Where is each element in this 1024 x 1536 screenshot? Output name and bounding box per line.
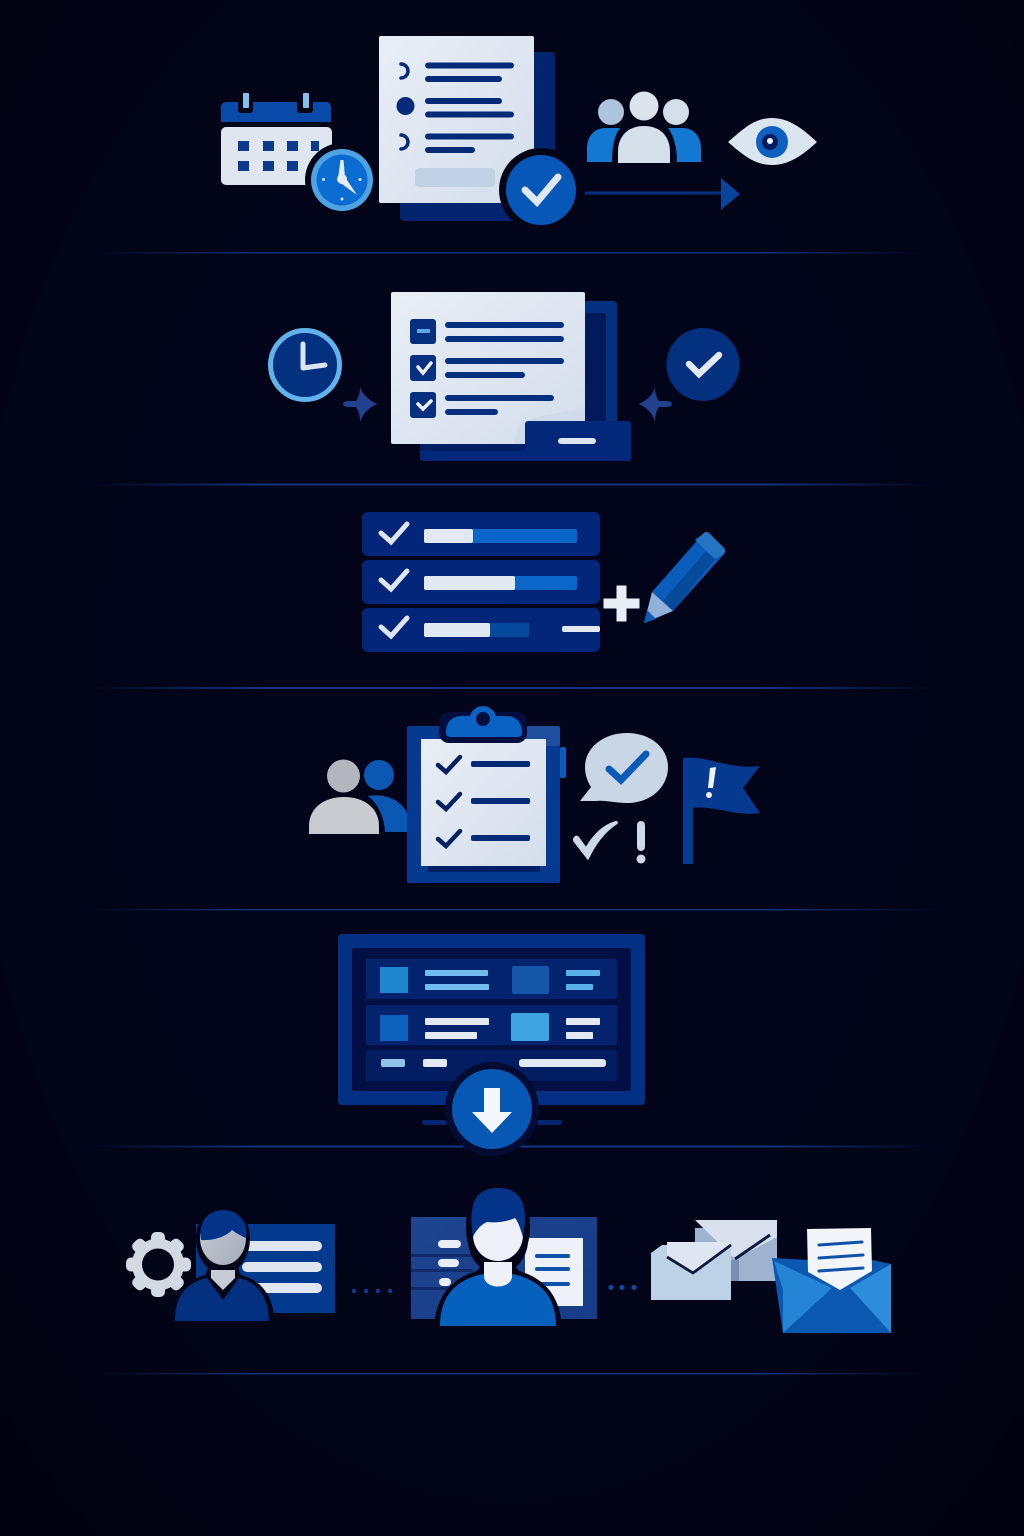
section 3: progress rows and pencil <box>362 512 725 652</box>
icon: pencil <box>644 532 725 623</box>
front tray with dash <box>420 421 631 461</box>
icon: plus <box>604 586 639 621</box>
person with collar <box>171 1206 275 1325</box>
check mark <box>574 822 617 859</box>
icon: two people <box>309 760 408 834</box>
progress row 1 <box>362 512 600 556</box>
section 4: team clipboard review <box>309 706 760 883</box>
arrow star left <box>343 387 377 422</box>
arrow right <box>585 178 740 210</box>
progress row 3 <box>362 608 600 652</box>
central person <box>434 1185 562 1329</box>
table row 2 <box>366 1005 617 1045</box>
dots <box>352 1289 392 1293</box>
icon: gear <box>126 1232 191 1297</box>
envelope front <box>651 1242 731 1300</box>
centre panel <box>411 1217 597 1319</box>
clipboard <box>407 706 566 883</box>
document with list <box>379 36 534 203</box>
icon: group of people <box>587 92 701 163</box>
stand lines <box>422 1120 562 1125</box>
dots <box>608 1285 636 1290</box>
progress row 2 <box>362 560 600 604</box>
icon: check circle <box>666 328 740 401</box>
section 1: review document workflow <box>221 36 817 232</box>
download badge <box>445 1062 539 1156</box>
icon: calendar <box>221 93 332 185</box>
icon: approval check badge <box>499 148 583 232</box>
list panel <box>196 1224 335 1313</box>
speech bubble with check <box>580 733 668 803</box>
monitor frame <box>338 934 645 1105</box>
flag with exclamation <box>683 758 760 864</box>
back monitor panel <box>575 301 617 431</box>
document checklist <box>391 292 585 444</box>
icon: clock on calendar <box>305 143 379 217</box>
section 6: people and mail <box>126 1185 891 1333</box>
exclamation mark <box>636 821 646 864</box>
back sheet of document <box>400 52 555 221</box>
section 5: dashboard monitor with download <box>338 934 645 1156</box>
icon: clock <box>270 330 340 400</box>
open mail envelope <box>772 1228 891 1333</box>
envelope back <box>695 1220 777 1281</box>
arrow star right <box>639 387 672 422</box>
table row 1 <box>366 959 617 999</box>
table row 3 <box>366 1050 617 1081</box>
icon: eye <box>728 118 817 165</box>
section 2: checklist with clock and approval <box>270 292 740 461</box>
